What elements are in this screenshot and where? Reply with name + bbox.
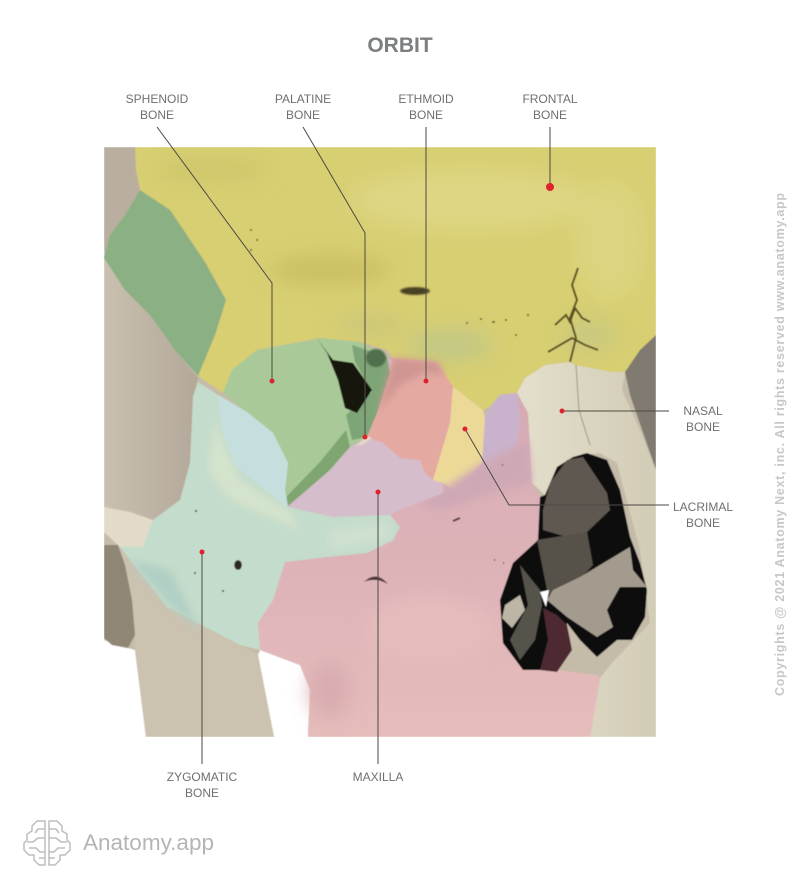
mastoid textured bone xyxy=(104,545,135,648)
label: maxilla: MAXILLA xyxy=(353,770,403,784)
superior orbital fissure xyxy=(318,340,372,413)
left inner bone xyxy=(502,595,525,628)
base bone backing xyxy=(104,338,656,678)
leader line: sphenoid bone xyxy=(157,127,274,384)
sphenoid greater wing xyxy=(223,338,372,498)
frontonasal suture xyxy=(548,268,598,362)
leader line: nasal bone xyxy=(560,408,669,414)
label: ethmoid bone: ETHMOID xyxy=(398,92,454,106)
inferior concha xyxy=(547,547,647,637)
sphenoid shading xyxy=(287,345,390,507)
zygomatic bone xyxy=(120,382,400,650)
nasal cavity xyxy=(500,453,647,672)
temporal green region xyxy=(104,190,226,376)
central septum xyxy=(537,532,593,595)
label: nasal bone: BONE xyxy=(686,420,720,434)
zygomatic orbital surface xyxy=(218,395,288,507)
zygomatic arch stump xyxy=(104,507,153,547)
zygomaticofacial foramina xyxy=(194,511,241,591)
label: sphenoid bone: BONE xyxy=(140,108,174,122)
white gap xyxy=(540,590,549,607)
leader line: lacrimal bone xyxy=(462,426,669,505)
maxillary septum edge xyxy=(540,608,572,672)
label: frontal bone: BONE xyxy=(533,108,567,122)
label: ethmoid bone: BONE xyxy=(409,108,443,122)
maxilla frontal process xyxy=(482,393,520,463)
temporal and background bone xyxy=(104,147,309,729)
maxilla xyxy=(258,393,600,737)
label: nasal bone: NASAL xyxy=(683,404,723,418)
orbit backing xyxy=(352,358,422,466)
right dark background xyxy=(625,335,656,470)
middle turbinate xyxy=(543,457,610,537)
maxilla shading xyxy=(299,668,345,718)
palatine tip xyxy=(356,436,372,446)
ethmoid bone xyxy=(367,358,453,480)
lacrimal bone xyxy=(433,387,485,492)
frontal bone shading xyxy=(150,156,645,361)
label: lacrimal bone: BONE xyxy=(686,516,720,530)
infraorbital foramen xyxy=(364,576,388,584)
copyright notice: Copyrights @ 2021 Anatomy Next, inc. All rights reserved www.anatomy.app xyxy=(773,193,787,696)
leader line: ethmoid bone xyxy=(424,127,428,384)
nasal bone xyxy=(517,362,656,737)
label: palatine bone: BONE xyxy=(286,108,320,122)
skull illustration xyxy=(104,147,656,737)
logo xyxy=(24,821,214,865)
label: zygomatic bone: ZYGOMATIC xyxy=(167,770,237,784)
leader line: palatine bone xyxy=(303,127,368,440)
nasal midline suture xyxy=(576,365,590,445)
label: sphenoid bone: SPHENOID xyxy=(126,92,188,106)
leader line: frontal bone xyxy=(546,127,554,191)
label: zygomatic bone: BONE xyxy=(185,786,219,800)
ethmoid shading xyxy=(377,358,445,413)
glabellar notch xyxy=(400,287,430,295)
icon: brain xyxy=(24,821,70,865)
maxilla orbital surface xyxy=(288,470,443,518)
label: lacrimal bone: LACRIMAL xyxy=(673,500,733,514)
leader line: zygomatic bone xyxy=(200,550,204,764)
zygomatic shading xyxy=(136,432,387,624)
logo wordmark: Anatomy.app xyxy=(83,830,214,855)
small foramina xyxy=(250,230,529,335)
frontal bone xyxy=(135,147,656,410)
label: frontal bone: FRONTAL xyxy=(522,92,578,106)
label: palatine bone: PALATINE xyxy=(275,92,331,106)
title: ORBIT xyxy=(367,34,433,57)
leader line: maxilla xyxy=(376,490,380,764)
maxilla small marks xyxy=(453,465,504,563)
